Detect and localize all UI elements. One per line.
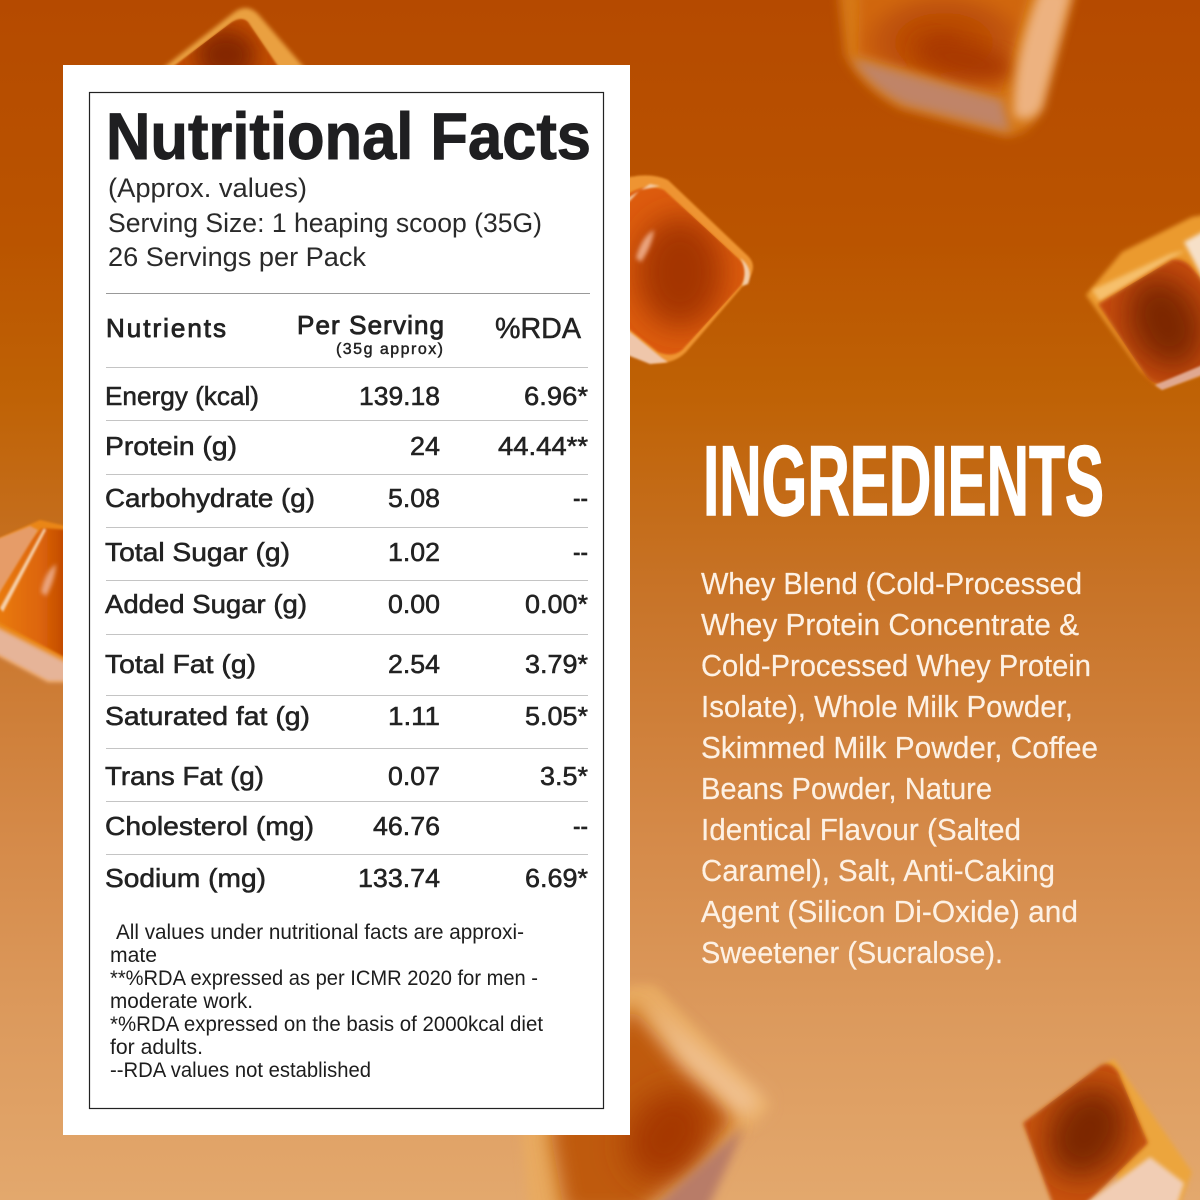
row: carbohydrate: [105, 483, 588, 513]
row: total sugar: [105, 537, 588, 567]
row: cholesterol: Cholesterol (mg): [105, 811, 314, 841]
footnotes: *%RDA expressed on the basis of 2000kcal diet: [110, 1013, 543, 1036]
table header: (35g approx): [336, 341, 443, 358]
ingredients list: Isolate), Whole Milk Powder,: [701, 689, 1073, 724]
footnotes: for adults.: [110, 1036, 203, 1059]
ingredients list: Skimmed Milk Powder, Coffee: [701, 730, 1098, 765]
row: cholesterol: [105, 811, 588, 841]
table header: Per Serving: [297, 310, 444, 340]
icon: caramel cube left: [0, 520, 70, 682]
row: total fat: 3.79*: [525, 649, 588, 679]
icon: caramel cube right: [1086, 214, 1200, 390]
row: added sugar: Added Sugar (g): [105, 589, 307, 619]
row: trans fat: [105, 761, 588, 791]
ingredients list: Cold-Processed Whey Protein: [701, 648, 1091, 683]
panel: nutrition card: [63, 65, 630, 1135]
row: saturated fat: 1.11: [388, 701, 440, 731]
footnotes: **%RDA expressed as per ICMR 2020 for men -: [110, 967, 538, 990]
icon: caramel cube bottom right: [1023, 1059, 1192, 1200]
icon: caramel cube centre: [625, 175, 753, 364]
row: protein: Protein (g): [105, 431, 237, 461]
row: protein: [105, 431, 588, 461]
ingredients list: Whey Blend (Cold-Processed: [701, 566, 1082, 601]
footnotes: moderate work.: [110, 990, 253, 1013]
row: saturated fat: 5.05*: [525, 701, 588, 731]
icon: caramel cube top left: [163, 6, 305, 65]
row: total fat: Total Fat (g): [105, 649, 256, 679]
row: carbohydrate: --: [573, 483, 588, 513]
ingredients list: Caramel), Salt, Anti-Caking: [701, 853, 1055, 888]
row: sodium: [105, 863, 588, 893]
table header: Nutrients: [106, 313, 226, 343]
row: protein: 24: [410, 431, 440, 461]
ingredients list: [701, 566, 1098, 970]
footnotes: All values under nutritional facts are approxi-: [116, 921, 524, 944]
row: sodium: 6.69*: [525, 863, 588, 893]
ingredients list: Whey Protein Concentrate &: [701, 607, 1079, 642]
row: total sugar: --: [573, 537, 588, 567]
footnotes: --RDA values not established: [110, 1059, 371, 1082]
table header: [106, 294, 590, 358]
row: added sugar: 0.00*: [525, 589, 588, 619]
row: carbohydrate: Carbohydrate (g): [105, 483, 315, 513]
row: added sugar: [105, 589, 588, 619]
row: protein: 44.44**: [498, 431, 588, 461]
row: sodium: Sodium (mg): [105, 863, 266, 893]
serving information: (Approx. values): [108, 173, 307, 203]
icon: blurred caramel cube top right: [838, 0, 1075, 136]
row: trans fat: 3.5*: [540, 761, 588, 791]
ingredients list: Identical Flavour (Salted: [701, 812, 1021, 847]
row: total fat: 2.54: [388, 649, 440, 679]
row: total fat: [105, 649, 588, 679]
nutrition table rows: [105, 368, 588, 893]
icon: blurred caramel cube bottom centre: [522, 985, 770, 1200]
row: saturated fat: [105, 701, 588, 731]
row: carbohydrate: 5.08: [388, 483, 440, 513]
serving information: Serving Size: 1 heaping scoop (35G): [108, 208, 542, 238]
heading: nutritional facts: Nutritional Facts: [106, 99, 591, 173]
serving information: [108, 173, 542, 272]
row: saturated fat: Saturated fat (g): [105, 701, 310, 731]
table header: %RDA: [495, 313, 582, 345]
row: total sugar: 1.02: [388, 537, 440, 567]
footnotes: [110, 921, 543, 1082]
row: energy: [105, 381, 588, 411]
ingredients list: Agent (Silicon Di-Oxide) and: [701, 894, 1078, 929]
row: trans fat: 0.07: [388, 761, 440, 791]
row: cholesterol: --: [573, 811, 588, 841]
row: energy: Energy (kcal): [105, 381, 259, 411]
row: energy: 6.96*: [524, 381, 588, 411]
row: sodium: 133.74: [358, 863, 440, 893]
ingredients list: Sweetener (Sucralose).: [701, 935, 1003, 970]
row: energy: 139.18: [359, 381, 440, 411]
serving information: 26 Servings per Pack: [108, 242, 366, 272]
ingredients list: Beans Powder, Nature: [701, 771, 992, 806]
row: cholesterol: 46.76: [373, 811, 440, 841]
row: total sugar: Total Sugar (g): [105, 537, 290, 567]
footnotes: mate: [110, 944, 157, 967]
row: trans fat: Trans Fat (g): [105, 761, 264, 791]
row: added sugar: 0.00: [388, 589, 440, 619]
